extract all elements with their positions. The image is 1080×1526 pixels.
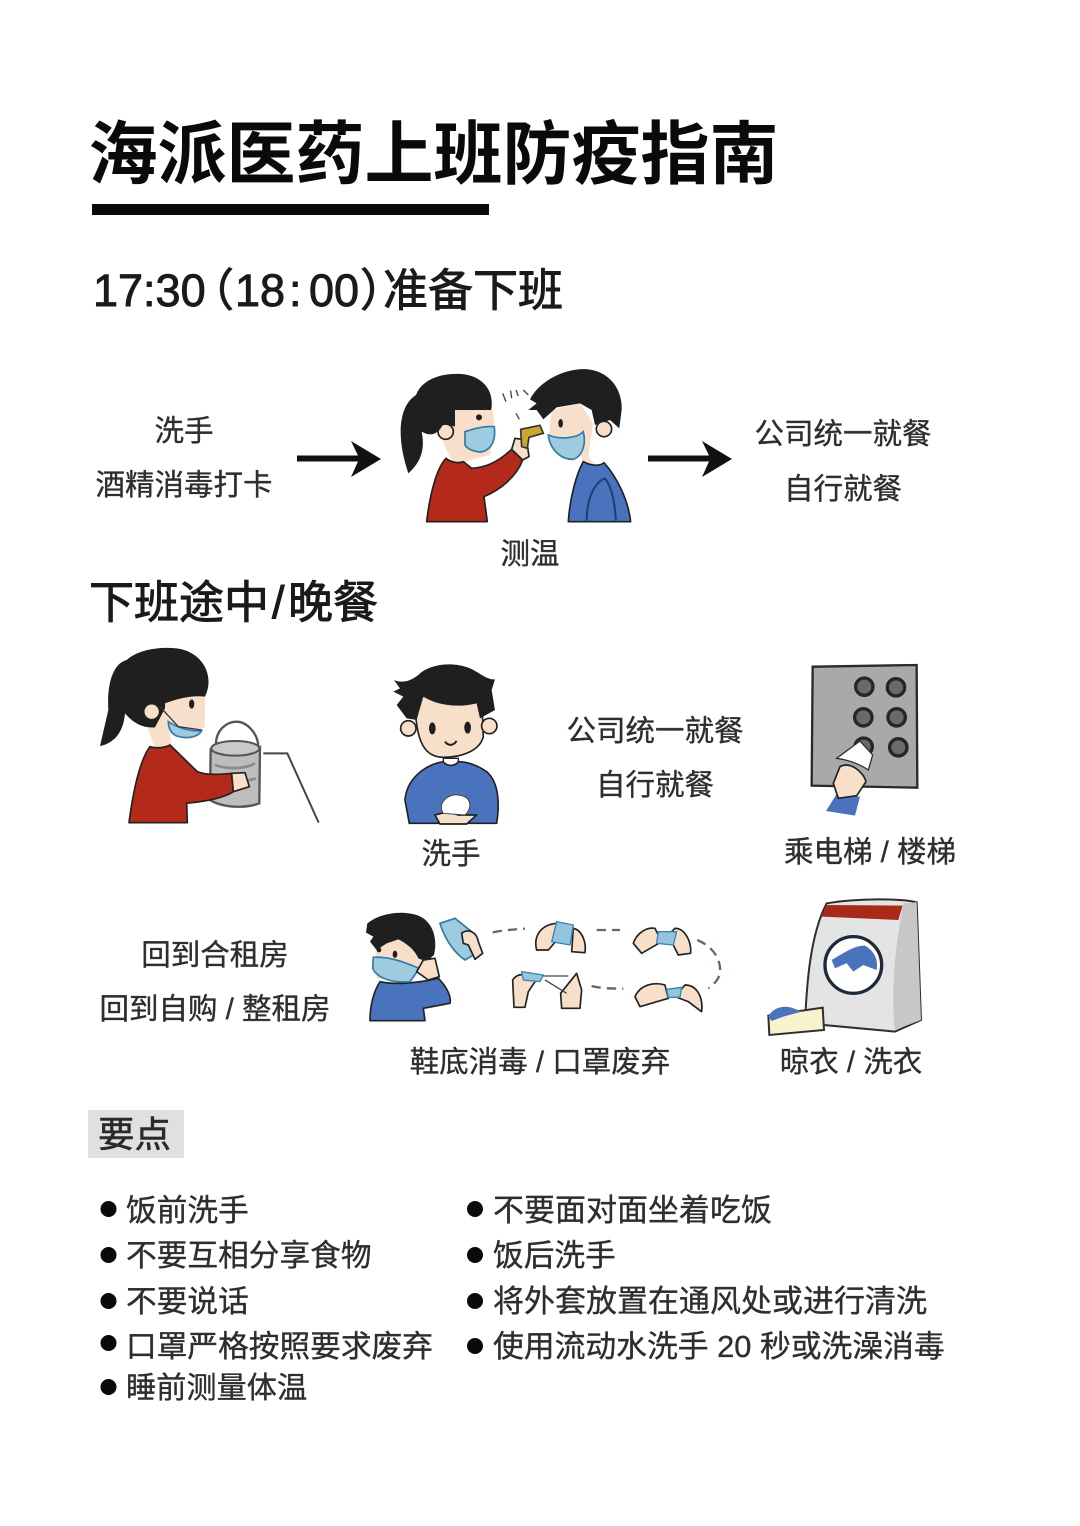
title underline (92, 204, 489, 215)
text: dining choice: 自行就餐 (784, 473, 902, 506)
key points: left column: 口罩严格按照要求废弃 (126, 1329, 433, 1364)
heading: commute and dinner: 下班途中 (89, 577, 269, 628)
text: dining choice on the way (566, 715, 744, 802)
heading: preparing to leave work: 准备下班 (383, 265, 563, 316)
heading: commute and dinner: 晚餐 (288, 577, 378, 628)
label: drying or washing clothes: 晾衣 / 洗衣 (780, 1046, 922, 1079)
heading: preparing to leave work: : (289, 265, 302, 316)
text: returning home options (99, 939, 331, 1026)
label: shoe disinfection and mask disposal: 鞋底消毒 / 口罩废弃 (410, 1046, 670, 1079)
text: dining choice on the way: 公司统一就餐 (566, 715, 744, 748)
key points: right column (467, 1193, 945, 1364)
heading: preparing to leave work: ） (360, 265, 405, 316)
key points: left column: 饭前洗手 (126, 1193, 249, 1228)
key points: left column (100, 1193, 433, 1405)
heading: commute and dinner: / (272, 577, 285, 628)
heading: preparing to leave work: 18 (235, 265, 285, 316)
text: wash hands and sanitise: 洗手 (154, 415, 214, 448)
key points tag: 要点 (98, 1114, 171, 1155)
title: 海派医药上班防疫指南 (88, 116, 778, 193)
text: dining choice (754, 418, 932, 506)
heading: preparing to leave work: 00 (309, 265, 359, 316)
text: dining choice: 公司统一就餐 (754, 418, 932, 451)
label: elevator or stairs: 乘电梯 / 楼梯 (784, 836, 956, 869)
key points: right column: 饭后洗手 (493, 1238, 616, 1273)
text: returning home options: 回到自购 / 整租房 (99, 993, 331, 1026)
key points: right column: 不要面对面坐着吃饭 (493, 1193, 772, 1228)
illustration: removing and discarding mask (366, 913, 720, 1021)
illustration: temperature check (401, 369, 631, 522)
arrow: to dining (648, 441, 732, 477)
heading: preparing to leave work: （ (189, 265, 234, 316)
text: wash hands and sanitise (95, 415, 273, 502)
text: returning home options: 回到合租房 (141, 939, 289, 972)
arrow: to temperature check (297, 441, 381, 477)
key points: right column: 使用流动水洗手 20 秒或洗澡消毒 (493, 1329, 945, 1364)
key points: left column: 不要说话 (126, 1284, 249, 1319)
key points: right column: 将外套放置在通风处或进行清洗 (493, 1284, 927, 1319)
key points: left column: 不要互相分享食物 (126, 1238, 372, 1273)
heading: preparing to leave work: 17:30 (93, 265, 206, 316)
illustration: elevator buttons pressed with tissue (812, 665, 917, 816)
text: dining choice on the way: 自行就餐 (596, 769, 714, 802)
key points tag (88, 1110, 184, 1158)
label: temperature check: 测温 (500, 538, 560, 571)
text: wash hands and sanitise: 酒精消毒打卡 (95, 469, 273, 502)
key points: left column: 睡前测量体温 (126, 1371, 307, 1405)
illustration: girl with disinfectant bucket (100, 648, 498, 824)
illustration: washing machine (768, 899, 921, 1035)
label: wash hands: 洗手 (421, 838, 481, 871)
